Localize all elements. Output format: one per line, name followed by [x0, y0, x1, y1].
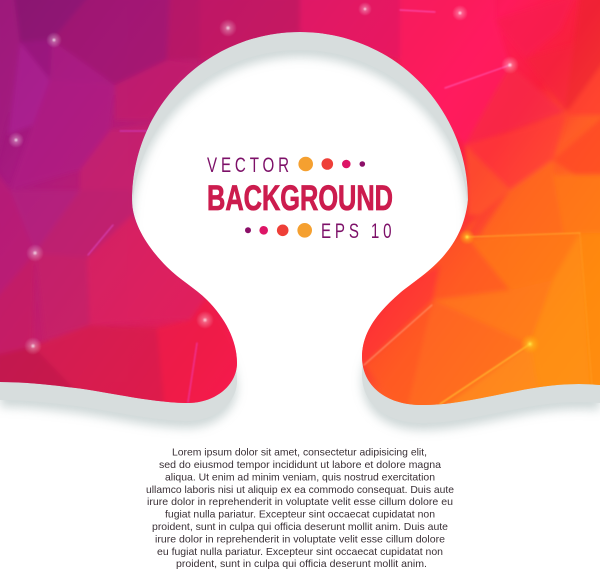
- lorem ipsum body text: proident, sunt in culpa qui officia deserunt mollit anim. Duis aute: [152, 521, 448, 533]
- drop shadow under paper edge: [0, 25, 600, 430]
- headline block: [207, 152, 393, 243]
- VECTOR label: VECTOR: [207, 152, 289, 177]
- lorem ipsum body text: aliqua. Ut enim ad minim veniam, quis nostrud exercitation: [165, 472, 435, 484]
- lorem ipsum body text: proident, sunt in culpa qui officia deserunt mollit anim.: [176, 558, 427, 570]
- lorem ipsum body text: irure dolor in reprehenderit in voluptate velit esse cillum dolore: [155, 534, 445, 546]
- lorem ipsum body text: sed do eiusmod tempor incididunt ut labore et dolore magna: [159, 459, 441, 471]
- low-poly facets: [0, 0, 600, 410]
- BACKGROUND heading: BACKGROUND: [207, 179, 393, 218]
- light streaks: [88, 10, 592, 404]
- EPS 10 label: EPS 10: [321, 218, 392, 243]
- polygon gradient background: [0, 0, 600, 420]
- sparkles: [8, 2, 540, 355]
- lorem ipsum body text: eu fugiat nulla pariatur. Excepteur sint occaecat cupidatat non: [157, 546, 443, 558]
- grey paper edge: [0, 18, 600, 423]
- top dots row: [298, 157, 365, 171]
- lorem ipsum body text: [146, 446, 454, 570]
- lorem ipsum body text: ullamco laboris nisi ut aliquip ex ea commodo consequat. Duis aute: [146, 484, 454, 496]
- lorem ipsum body text: fugiat nulla pariatur. Excepteur sint occaecat cupidatat non: [165, 508, 435, 520]
- lorem ipsum body text: irure dolor in reprehenderit in voluptate velit esse cillum dolore eu: [147, 496, 453, 508]
- lorem ipsum body text: Lorem ipsum dolor sit amet, consectetur adipisicing elit,: [172, 446, 427, 458]
- bottom dots row: [245, 223, 312, 238]
